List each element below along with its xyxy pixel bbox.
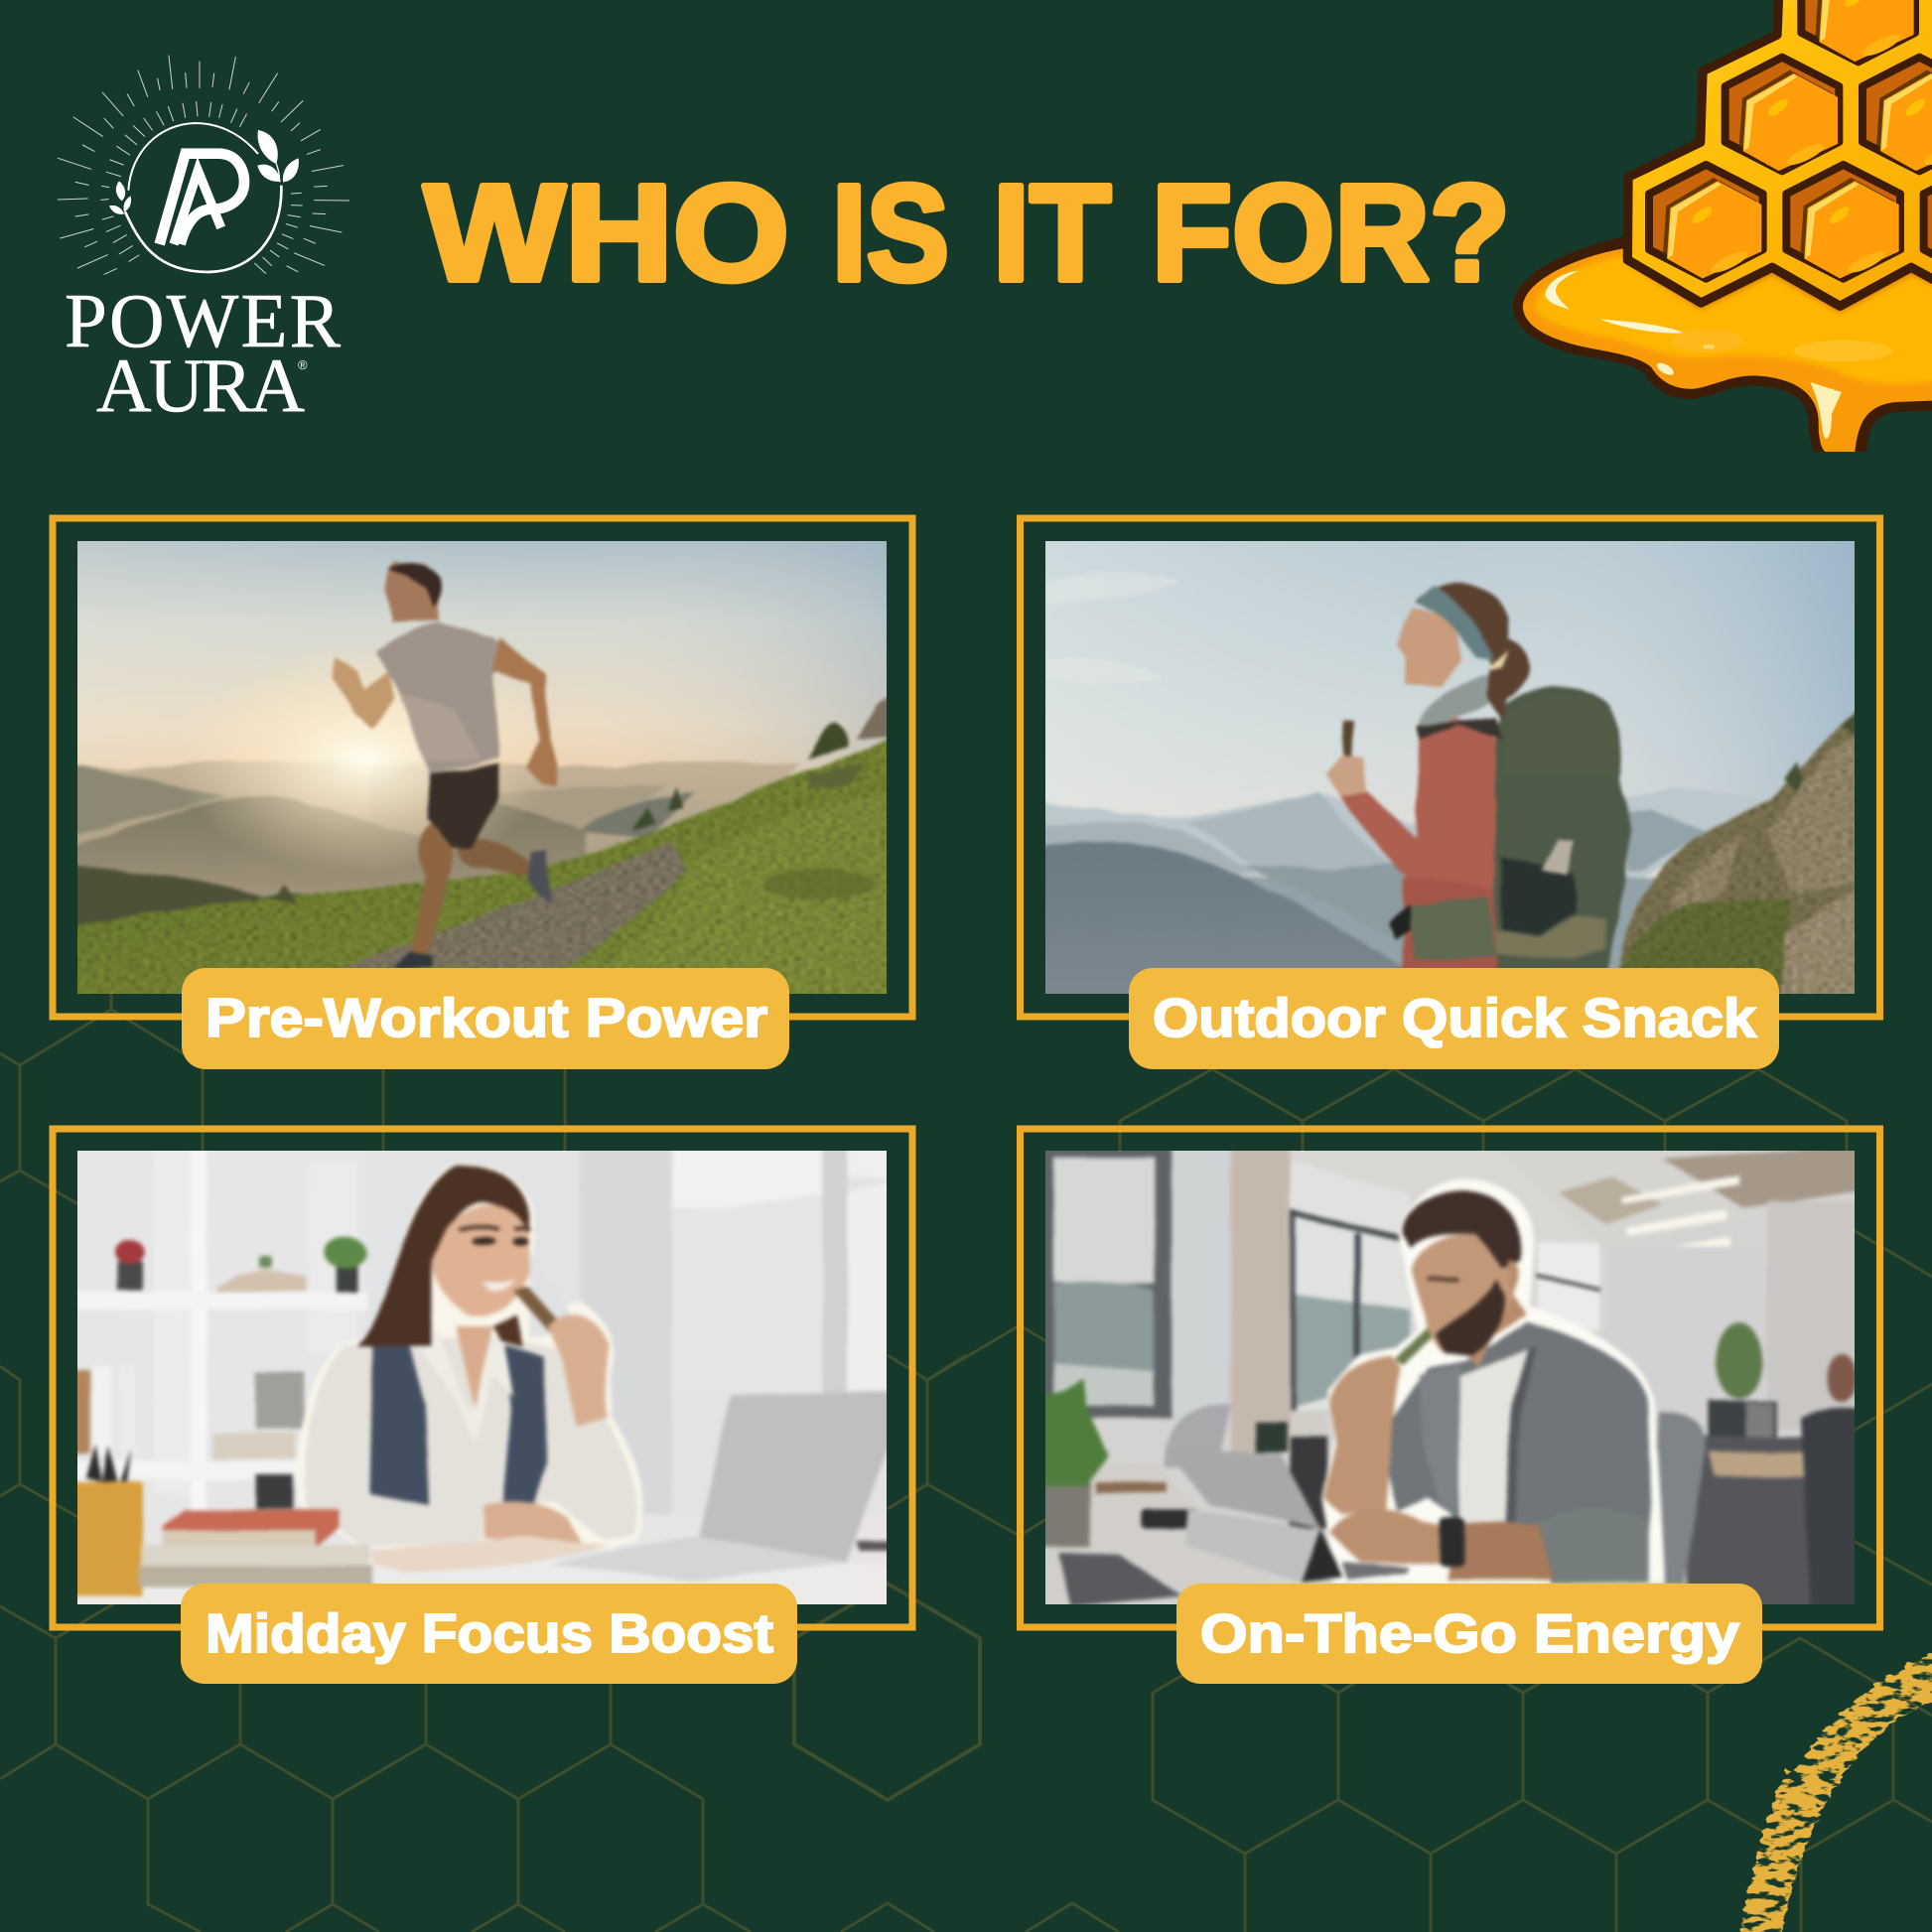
- photo: runner on mountain trail: [62, 530, 905, 1003]
- gold frame: [1021, 1129, 1880, 1627]
- man: [1323, 1180, 1664, 1584]
- label text: On-The-Go Energy: [1200, 1602, 1739, 1664]
- title: WHO: [424, 157, 789, 310]
- background hexagon pattern: [0, 994, 1932, 1932]
- registered mark: ®: [298, 357, 308, 372]
- photo: man in office with tablet: [1028, 1140, 1871, 1611]
- comb cells: [1649, 0, 1932, 279]
- icon: honeycomb with dripping honey: [1513, 0, 1932, 457]
- photo: hiker with backpack: [1028, 530, 1871, 1003]
- logo: Power Aura: [58, 56, 349, 428]
- panel: Pre-Workout Power: [53, 518, 912, 1069]
- photo: woman at desk with laptop: [62, 1140, 905, 1611]
- woman: [301, 1165, 639, 1547]
- gold frame: [53, 1129, 912, 1627]
- gold frame: [53, 518, 912, 1017]
- runner: [410, 823, 454, 957]
- title: FOR?: [1152, 157, 1510, 310]
- logo wordmark POWER: POWER: [65, 278, 342, 363]
- label text: Outdoor Quick Snack: [1153, 987, 1756, 1048]
- gold frame: [1021, 518, 1880, 1017]
- honey puddle: [1513, 236, 1932, 457]
- panel: Midday Focus Boost: [53, 1129, 912, 1684]
- label pill: [1176, 1584, 1762, 1684]
- title: IS: [832, 157, 949, 310]
- label text: Midday Focus Boost: [206, 1602, 773, 1664]
- desk books: [162, 1510, 339, 1549]
- logo emblem: sun rays, circle and monogram: [58, 56, 349, 274]
- hiker: [1339, 718, 1502, 903]
- decorative gold brush stroke: [1747, 1673, 1932, 1932]
- label pill: [182, 968, 789, 1069]
- panel: On-The-Go Energy: [1021, 1129, 1880, 1684]
- title: [424, 157, 1510, 310]
- label pill: [1129, 968, 1779, 1069]
- label pill: [181, 1584, 797, 1684]
- laptop: [698, 1389, 887, 1563]
- comb body: [1627, 0, 1932, 306]
- panel: Outdoor Quick Snack: [1021, 518, 1880, 1069]
- logo wordmark AURA: AURA: [96, 343, 305, 428]
- title: IT: [993, 157, 1111, 310]
- label text: Pre-Workout Power: [206, 987, 767, 1048]
